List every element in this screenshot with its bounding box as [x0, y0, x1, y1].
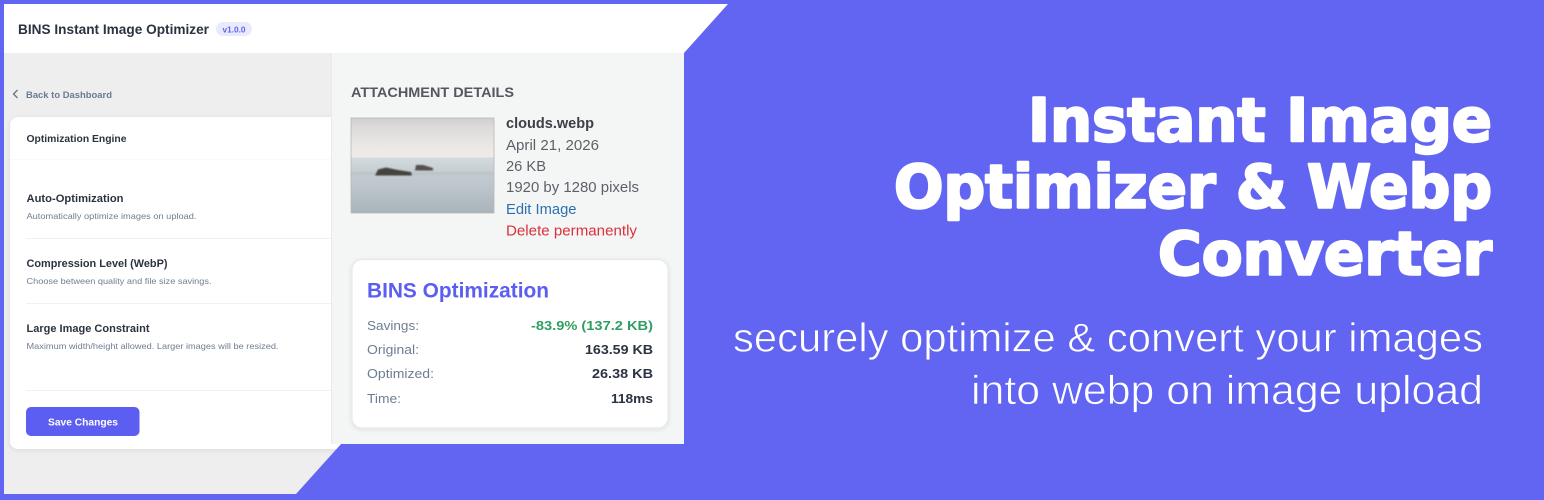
save changes button — [26, 407, 140, 436]
setting: large image constraint: Large Image Constraint — [26, 323, 150, 335]
row: original — [367, 342, 653, 357]
row: optimized: Optimized: — [367, 366, 434, 381]
row: original: Original: — [367, 342, 419, 357]
back link — [12, 90, 112, 98]
row: optimized — [367, 366, 653, 381]
save changes button: Save Changes — [48, 418, 118, 428]
subtitle — [733, 315, 1483, 413]
row: time: Time: — [367, 391, 401, 406]
setting: large image constraint: Maximum width/height allowed. Larger images will be resized. — [26, 341, 278, 351]
row: savings — [367, 318, 653, 333]
setting: large image constraint — [26, 323, 278, 351]
panel: attachment details — [331, 53, 684, 444]
setting: compression level — [26, 258, 212, 286]
row: optimized: 26.38 KB — [592, 366, 653, 381]
setting: auto-optimization — [26, 193, 197, 221]
headline: Converter — [1158, 220, 1492, 290]
back link: Back to Dashboard — [26, 90, 112, 101]
setting: compression level: Choose between quality and file size savings. — [26, 276, 212, 286]
subtitle: securely optimize & convert your images — [733, 315, 1483, 361]
headline: Optimizer & Webp — [894, 153, 1492, 223]
setting: compression level: Compression Level (WebP) — [26, 258, 168, 270]
version badge — [216, 22, 252, 36]
row: savings: -83.9% (137.2 KB) — [531, 318, 653, 333]
file metadata — [506, 116, 639, 240]
headline — [894, 86, 1492, 290]
panel: settings sidebar — [4, 53, 355, 494]
file metadata: April 21, 2026 — [506, 138, 599, 154]
header title: BINS Instant Image Optimizer — [18, 21, 210, 37]
edit image link: Edit Image — [506, 202, 576, 218]
file metadata: 1920 by 1280 pixels — [506, 180, 639, 196]
delete link: Delete permanently — [506, 224, 638, 240]
subtitle: into webp on image upload — [971, 367, 1483, 413]
setting: auto-optimization: Automatically optimize images on upload. — [26, 211, 197, 221]
row: savings: Savings: — [367, 318, 419, 333]
row: time — [367, 391, 653, 406]
settings card — [10, 117, 355, 449]
file metadata: 26 KB — [506, 159, 546, 175]
card heading: BINS Optimization — [367, 280, 549, 302]
card: BINS optimization stats — [352, 260, 668, 428]
optimization engine heading: Optimization Engine — [26, 134, 127, 145]
thumbnail: clouds photo — [351, 118, 494, 213]
row: time: 118ms — [611, 391, 653, 406]
attachment details heading: ATTACHMENT DETAILS — [351, 85, 514, 100]
row: original: 163.59 KB — [585, 342, 653, 357]
panel: app header — [4, 4, 728, 53]
file metadata: clouds.webp — [506, 116, 594, 132]
headline: Instant Image — [1028, 86, 1492, 156]
version badge: v1.0.0 — [222, 24, 246, 34]
setting: auto-optimization: Auto-Optimization — [26, 193, 124, 205]
